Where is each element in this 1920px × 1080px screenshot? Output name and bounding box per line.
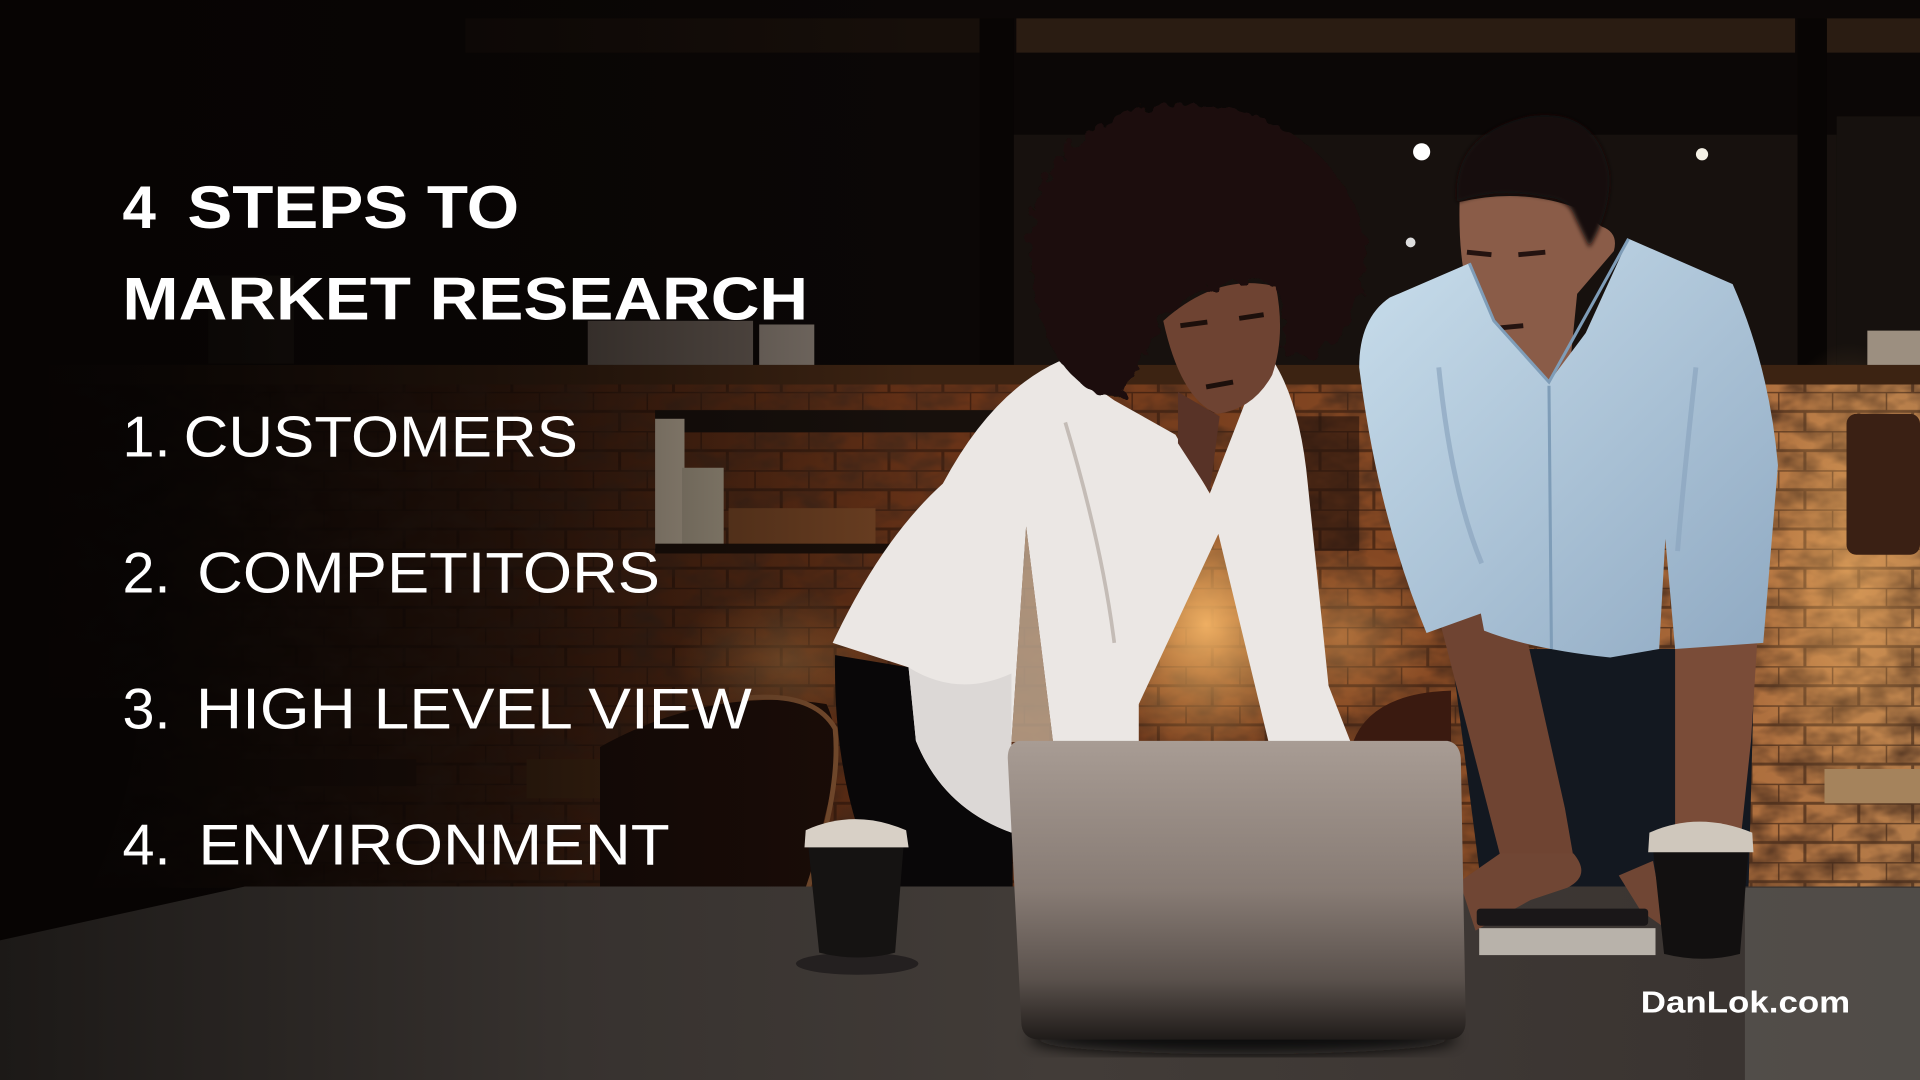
chairs and side tables — [0, 691, 1920, 931]
man hands — [1460, 853, 1665, 931]
man face and neck — [1459, 196, 1615, 416]
step 2: 2. — [122, 542, 170, 606]
woman — [833, 104, 1365, 888]
step 2: COMPETITORS — [197, 542, 660, 606]
step 1: CUSTOMERS — [184, 406, 578, 470]
coffee cup right — [1648, 822, 1753, 959]
table — [0, 887, 1920, 1080]
shelf and books — [49, 276, 1920, 555]
man shirt — [1359, 239, 1778, 658]
title: STEPS TO — [187, 174, 519, 241]
woman hair — [1030, 104, 1365, 397]
woman trousers — [835, 655, 1013, 888]
man trousers — [1451, 649, 1755, 888]
woman eyes and lips — [1180, 315, 1264, 387]
table right reflection — [1745, 888, 1920, 1080]
notebook and phone — [1477, 909, 1656, 955]
step 4: 4. — [122, 813, 170, 877]
brick wall — [49, 343, 1920, 888]
woman blouse shadow folds — [1011, 527, 1053, 742]
step 1: 1. — [122, 406, 170, 470]
ceiling lights — [1406, 143, 1708, 247]
man arms — [1441, 600, 1573, 857]
title: 4 — [122, 174, 156, 241]
step 4: ENVIRONMENT — [198, 813, 670, 877]
man eyes and lips — [1467, 252, 1545, 328]
step 3: 3. — [122, 678, 170, 742]
laptop — [1008, 741, 1466, 1054]
woman blouse — [833, 361, 1351, 833]
coffee cup left — [796, 819, 918, 975]
man — [1359, 115, 1778, 888]
title: MARKET RESEARCH — [122, 266, 808, 333]
title — [122, 174, 808, 333]
woman face — [1163, 283, 1280, 414]
brand: DanLok.com: DanLok.com — [1641, 986, 1850, 1020]
step list — [122, 406, 753, 877]
step 3: HIGH LEVEL VIEW — [196, 678, 753, 742]
man hair — [1457, 115, 1609, 247]
